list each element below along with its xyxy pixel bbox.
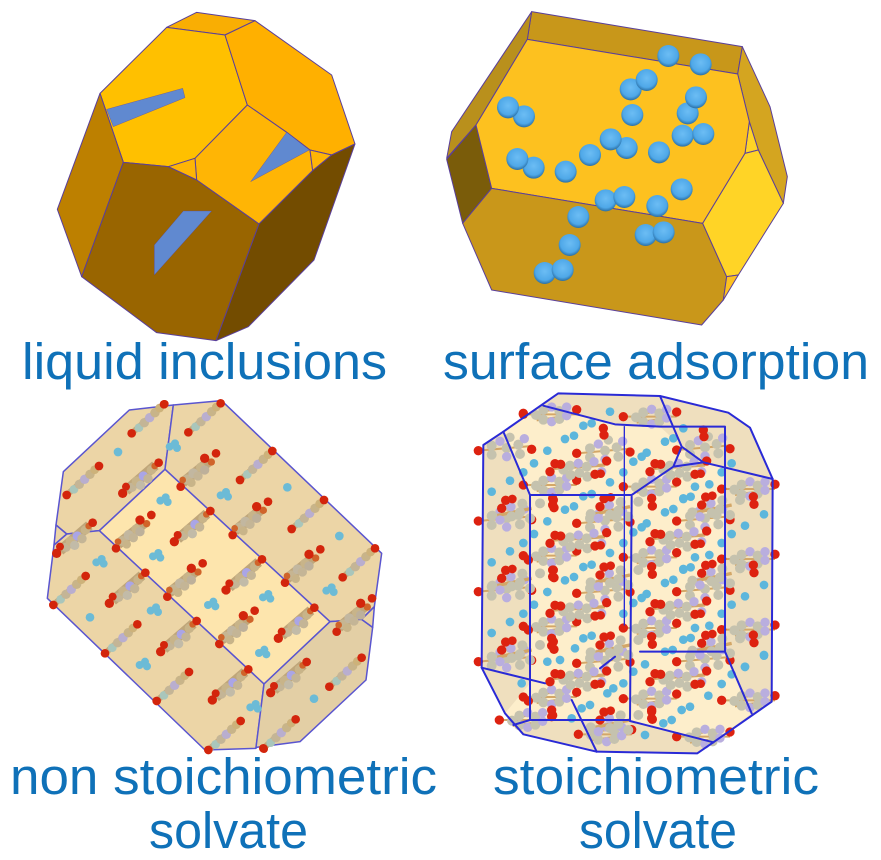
face: upper right — [165, 401, 382, 622]
host molecules — [49, 399, 379, 754]
face: front — [82, 162, 259, 341]
face: centre — [99, 469, 330, 684]
label: surface adsorption: surface adsorption — [443, 333, 869, 390]
face: right side — [216, 144, 355, 341]
label: stoichiometric: stoichiometric — [493, 748, 819, 805]
label: solvate (right): solvate — [579, 802, 737, 859]
face: small right — [745, 122, 758, 153]
panel: non stoichiometric solvate crystal — [47, 399, 382, 754]
light inner faces — [503, 406, 752, 742]
face: small left — [54, 525, 67, 545]
face: upper left — [447, 12, 532, 158]
face: small facet left — [168, 158, 197, 180]
face: upper left — [56, 405, 173, 534]
label: solvate (left): solvate — [149, 802, 308, 859]
panel: stoichiometric solvate crystal — [474, 393, 780, 753]
solvent dots lattice — [487, 407, 768, 739]
inclusion: bar — [107, 88, 185, 127]
face: top band — [527, 12, 742, 74]
label: liquid inclusions: liquid inclusions — [22, 333, 387, 390]
face: small lower right — [723, 275, 738, 300]
crystal outline fill — [482, 393, 773, 753]
face: dark left — [447, 125, 492, 223]
face: right yellow — [703, 150, 783, 277]
face: small facet right — [310, 150, 332, 171]
face: left side — [57, 93, 123, 277]
face: orange right — [225, 21, 355, 155]
face: upper right — [738, 47, 787, 203]
inclusion: triangle — [251, 132, 309, 182]
host molecules lattice — [474, 402, 780, 749]
face: lower right — [256, 619, 373, 747]
solvent molecules — [86, 439, 344, 713]
panel: surface adsorption crystal — [447, 12, 787, 325]
inclusion: wedge — [154, 211, 212, 275]
face: top cap — [167, 12, 255, 35]
face: small right — [362, 607, 374, 627]
face: main yellow — [100, 27, 247, 167]
crystal edges — [482, 393, 773, 753]
face: main — [476, 39, 749, 223]
face: middle — [195, 105, 313, 224]
adsorbed solvent spheres — [497, 45, 714, 284]
panel: liquid inclusions crystal — [57, 12, 355, 341]
face: lower left — [47, 531, 264, 750]
label: non stoichiometric: non stoichiometric — [10, 748, 437, 805]
face: front — [463, 188, 727, 325]
